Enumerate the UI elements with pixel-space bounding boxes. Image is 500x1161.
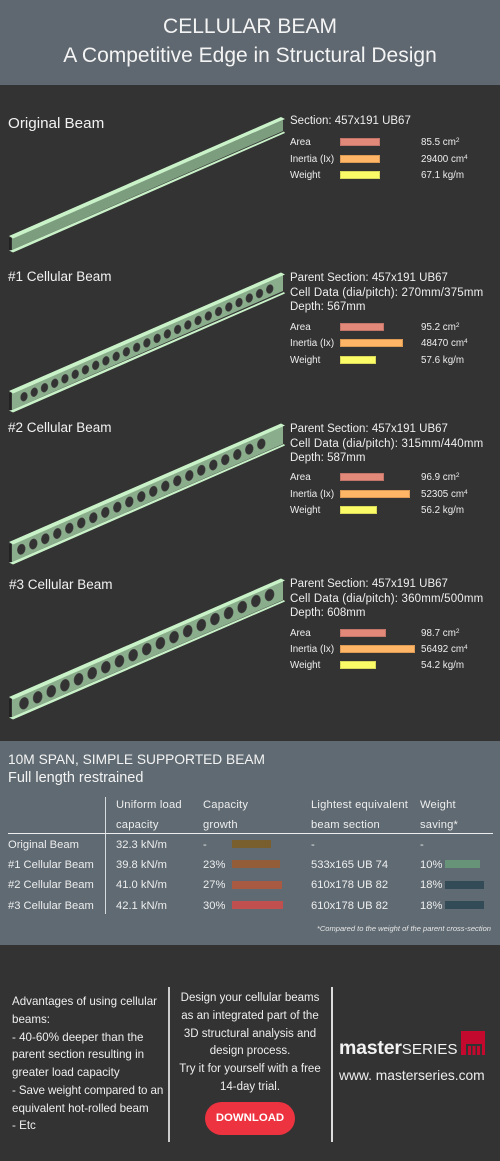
- title: A Competitive Edge in Structural Design: [63, 44, 437, 67]
- logo: masterseries: masterSERIES: [339, 1037, 457, 1059]
- advantages text: - 40-60% deeper than the: [12, 1030, 144, 1044]
- row: cellular beam 2: 610x178 UB 82: [311, 879, 388, 891]
- call to action text: 14-day trial.: [220, 1081, 280, 1093]
- stats: cellular 3: Weight: [290, 660, 320, 671]
- section data: cellular 1: Parent Section: 457x191 UB67: [290, 272, 448, 284]
- row: cellular beam 3: 18%: [420, 900, 442, 912]
- download button: DOWNLOAD: [216, 1112, 284, 1124]
- stats: original: 67.1 kg/m: [421, 170, 464, 181]
- section data: cellular 1: Cell Data (dia/pitch): 270mm/375mm: [290, 287, 483, 299]
- download button: [205, 1102, 295, 1135]
- stats: cellular 3: 54.2 kg/m: [421, 660, 464, 671]
- advantages text: parent section resulting in: [12, 1048, 144, 1061]
- row: cellular beam 2: #2 Cellular Beam: [8, 879, 94, 891]
- row: cellular beam 3: 42.1 kN/m: [116, 900, 167, 912]
- column headers: capacity: [116, 819, 159, 831]
- cells: [20, 283, 274, 402]
- table heading: [8, 752, 265, 786]
- stats: original: 29400 cm4: [421, 154, 468, 165]
- row: cellular beam 3: #3 Cellular Beam: [8, 900, 94, 912]
- table heading: 10M SPAN, SIMPLE SUPPORTED BEAM: [8, 752, 265, 767]
- footnote: *Compared to the weight of the parent cross-section: [317, 924, 491, 933]
- beam illustrations: [9, 117, 285, 720]
- advantages text: beams:: [12, 1013, 50, 1026]
- stats: cellular 1: Area: [290, 322, 311, 333]
- heading: original beam: Original Beam: [8, 115, 104, 132]
- call to action text: design process.: [210, 1045, 290, 1057]
- column headers: Weight: [420, 799, 456, 811]
- section data: cellular 1: Depth: 567mm: [290, 301, 365, 313]
- column headers: saving*: [420, 819, 458, 831]
- stats: cellular 2: 56.2 kg/m: [421, 505, 464, 516]
- title: [63, 15, 437, 67]
- call to action text: as an integrated part of the: [181, 1010, 319, 1022]
- section data: cellular 2: Parent Section: 457x191 UB67: [290, 423, 448, 435]
- column headers: beam section: [311, 819, 380, 831]
- row: original beam: -: [311, 839, 315, 851]
- stats: cellular 1: 95.2 cm2: [421, 322, 459, 333]
- logo: masterseries: [339, 1031, 485, 1059]
- advantages text: Advantages of using cellular: [12, 995, 157, 1008]
- row: cellular beam 1: [8, 859, 480, 871]
- advantages text: equivalent hot-rolled beam: [12, 1102, 149, 1114]
- stats: cellular 1: 57.6 kg/m: [421, 355, 464, 366]
- website url: www. masterseries.com: [339, 1068, 485, 1083]
- stats: cellular 1: Inertia (Ix): [290, 338, 334, 349]
- row: original beam: Original Beam: [8, 839, 79, 851]
- stats: original: Weight: [290, 170, 320, 181]
- section data: original: Section: 457x191 UB67: [290, 115, 411, 127]
- heading: cellular beam 1: #1 Cellular Beam: [8, 269, 112, 284]
- section data: cellular 3: Depth: 608mm: [290, 607, 365, 619]
- row: cellular beam 1: 10%: [420, 859, 442, 871]
- stats: cellular 2: 52305 cm4: [421, 489, 468, 500]
- row: original beam: [8, 839, 424, 851]
- section data: cellular 2: Depth: 587mm: [290, 452, 365, 464]
- stats: cellular 2: [290, 472, 468, 516]
- stats: cellular 1: 48470 cm4: [421, 338, 468, 349]
- column headers: Lightest equivalent: [311, 799, 408, 811]
- column headers: [116, 799, 458, 831]
- column headers: Capacity: [203, 799, 248, 811]
- stats: original: Inertia (Ix): [290, 154, 334, 165]
- stats: cellular 3: Area: [290, 628, 311, 639]
- advantages text: [12, 995, 163, 1132]
- table heading: Full length restrained: [8, 770, 143, 786]
- advantages text: - Save weight compared to an: [12, 1084, 163, 1097]
- stats: cellular 2: Weight: [290, 505, 320, 516]
- panel: span comparison table: [0, 741, 500, 945]
- cells: [19, 587, 275, 711]
- section data: cellular 2: Cell Data (dia/pitch): 315mm/440mm: [290, 438, 483, 450]
- column headers: Uniform load: [116, 799, 182, 811]
- cells: [17, 437, 266, 556]
- stats: original: Area: [290, 137, 311, 148]
- row: cellular beam 2: 18%: [420, 879, 442, 891]
- section data: cellular 3: Parent Section: 457x191 UB67: [290, 578, 448, 590]
- stats: cellular 2: 96.9 cm2: [421, 472, 459, 483]
- title: CELLULAR BEAM: [163, 15, 337, 38]
- stats: cellular 3: 98.7 cm2: [421, 628, 459, 639]
- call to action text: Design your cellular beams: [181, 992, 319, 1004]
- call to action text: 3D structural analysis and: [184, 1028, 316, 1040]
- beam: cellular 3: [9, 578, 285, 720]
- row: cellular beam 2: 27%: [203, 879, 225, 891]
- advantages text: - Etc: [12, 1119, 36, 1132]
- beam: cellular 1: [9, 272, 285, 412]
- section data: cellular 3: [290, 578, 483, 619]
- stats: cellular 1: [290, 322, 468, 366]
- section data: cellular 2: [290, 423, 483, 464]
- beam: original: [9, 117, 285, 252]
- stats: cellular 2: Area: [290, 472, 311, 483]
- row: cellular beam 1: 533x165 UB 74: [311, 859, 388, 871]
- section data: cellular 1: [290, 272, 483, 313]
- advantages text: greater load capacity: [12, 1066, 120, 1079]
- call to action text: [179, 992, 321, 1093]
- heading: cellular beam 2: #2 Cellular Beam: [8, 420, 112, 435]
- row: cellular beam 1: 39.8 kN/m: [116, 859, 167, 871]
- stats: cellular 3: Inertia (Ix): [290, 644, 334, 655]
- column headers: growth: [203, 819, 238, 831]
- row: cellular beam 3: 610x178 UB 82: [311, 900, 388, 912]
- row: cellular beam 1: 23%: [203, 859, 225, 871]
- row: original beam: -: [420, 839, 424, 851]
- header banner: [0, 0, 500, 85]
- stats: cellular 3: 56492 cm4: [421, 644, 468, 655]
- stats: original: 85.5 cm2: [421, 137, 459, 148]
- row: cellular beam 2: [8, 879, 484, 891]
- stats: original: [290, 137, 468, 181]
- row: original beam: 32.3 kN/m: [116, 839, 167, 851]
- stats: cellular 3: [290, 628, 468, 671]
- row: cellular beam 3: [8, 900, 484, 912]
- call to action text: Try it for yourself with a free: [179, 1063, 321, 1075]
- icon: logo mark: [461, 1031, 485, 1055]
- stats: cellular 2: Inertia (Ix): [290, 489, 334, 500]
- beam: cellular 2: [9, 424, 285, 564]
- stats: cellular 1: Weight: [290, 355, 320, 366]
- row: cellular beam 2: 41.0 kN/m: [116, 879, 167, 891]
- row: original beam: -: [203, 839, 207, 851]
- heading: cellular beam 3: #3 Cellular Beam: [9, 577, 113, 592]
- row: cellular beam 3: 30%: [203, 900, 225, 912]
- section data: cellular 3: Cell Data (dia/pitch): 360mm/500mm: [290, 593, 483, 605]
- row: cellular beam 1: #1 Cellular Beam: [8, 859, 94, 871]
